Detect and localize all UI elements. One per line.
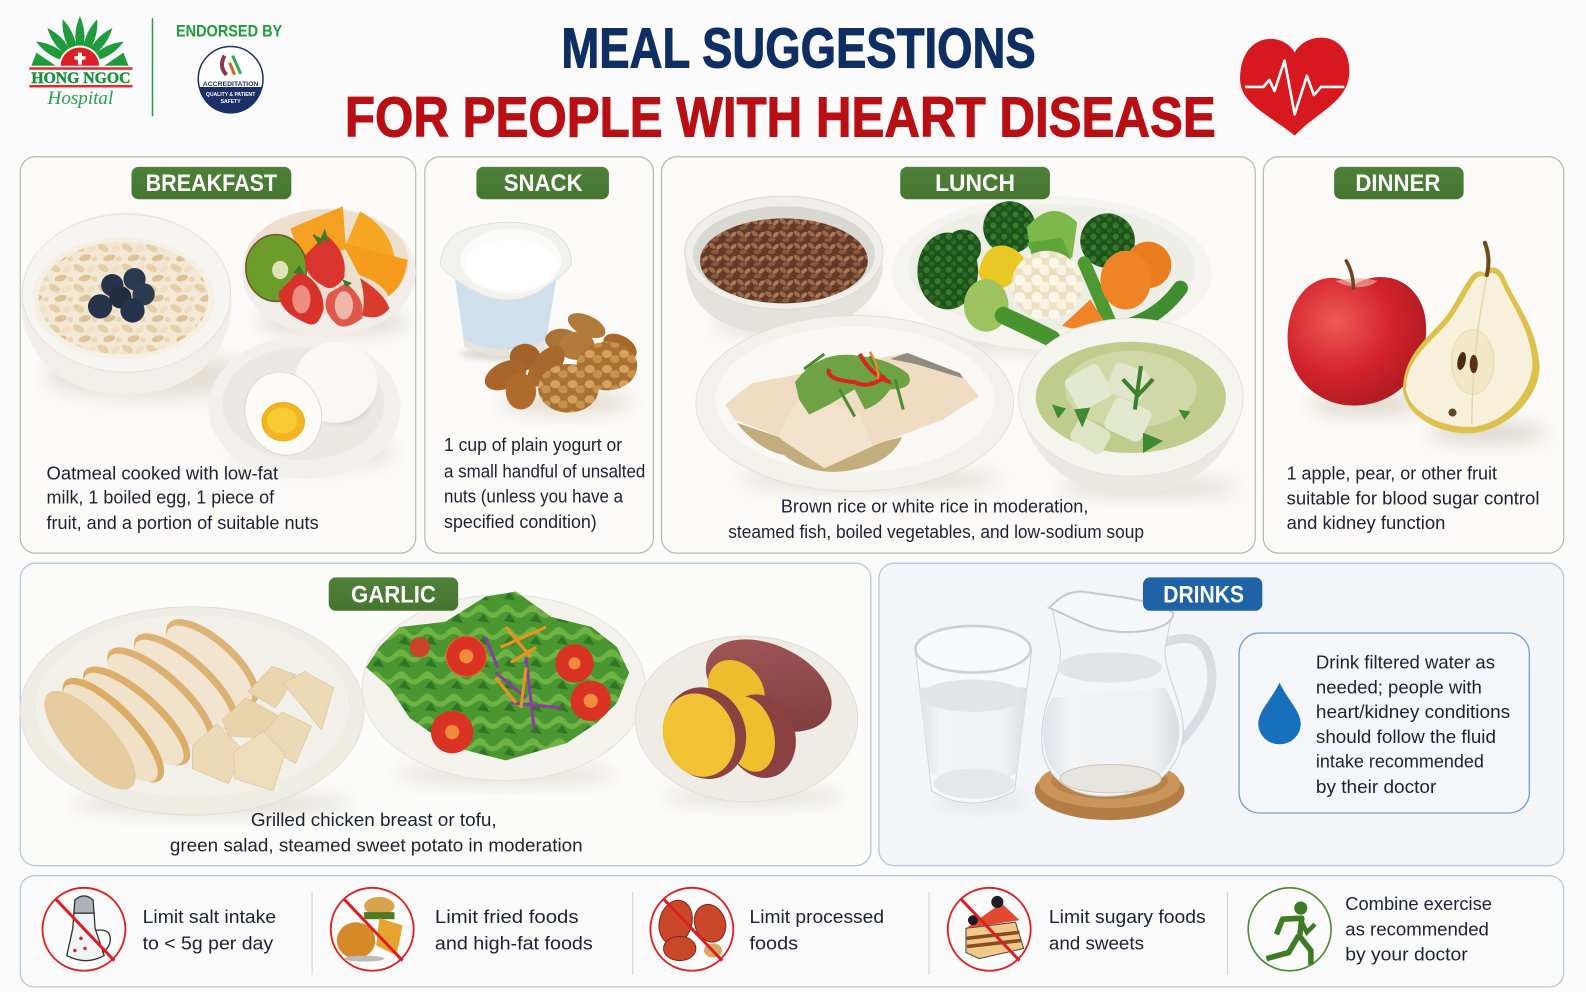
text: dinner description: 1 apple, pear, or other fruit (1287, 463, 1497, 483)
heading: lunch (900, 167, 1050, 199)
panel: garlic (20, 563, 871, 866)
panel: lunch (662, 157, 1255, 553)
food: oatmeal bowl (21, 212, 258, 398)
logo: Hong Ngoc Hospital: HONG NGOC (31, 70, 130, 87)
accreditation badge: SAFETY (221, 99, 241, 105)
food: boiled eggs (208, 336, 401, 479)
food: apple (1288, 261, 1426, 415)
panel: breakfast (20, 157, 416, 553)
vertical divider (152, 18, 153, 116)
text: garlic description: green salad, steamed sweet potato in moderation (170, 835, 583, 855)
food: glass of water (915, 626, 1032, 808)
title: FOR PEOPLE WITH HEART DISEASE (345, 87, 1216, 150)
food: pear half (1403, 243, 1546, 443)
text: snack description: 1 cup of plain yogurt or (444, 435, 622, 455)
tip: limit salt: to < 5g per day (143, 934, 274, 954)
tip: limit fried foods: Limit fried foods (435, 907, 579, 927)
text: garlic description: Grilled chicken breast or tofu, (251, 810, 497, 830)
text: breakfast description (47, 463, 319, 533)
tip: exercise: by your doctor (1345, 945, 1468, 965)
tip: limit processed foods: foods (750, 934, 798, 954)
food: brown rice bowl (685, 196, 885, 336)
food: steamed fish plate (696, 315, 1014, 491)
logo: Hong Ngoc Hospital: Hospital (47, 88, 113, 109)
title: MEAL SUGGESTIONS (561, 18, 1036, 81)
heading: snack: SNACK (504, 170, 583, 197)
food: yogurt cup (440, 222, 572, 361)
food: sweet potato plate (635, 621, 858, 805)
icon: water drop (1258, 683, 1301, 744)
icon: heart with ECG (1240, 38, 1349, 136)
tip: limit fried foods: and high-fat foods (435, 934, 593, 954)
tip: limit processed foods: Limit processed (750, 907, 884, 927)
text: breakfast description: Oatmeal cooked with low-fat (47, 463, 278, 483)
tip: exercise: as recommended (1345, 919, 1489, 939)
text: snack description: a small handful of unsalted (444, 461, 645, 481)
accreditation badge (198, 47, 263, 114)
accreditation badge: ACCREDITATION (203, 81, 259, 88)
text: snack description: specified condition) (444, 512, 597, 532)
text: lunch description (728, 497, 1144, 542)
text: snack description: nuts (unless you have a (444, 487, 624, 507)
text: breakfast description: fruit, and a portion of suitable nuts (47, 513, 319, 533)
text: water advice: heart/kidney conditions (1316, 702, 1510, 722)
title (345, 18, 1216, 150)
text: snack description (444, 435, 645, 532)
panel: tips strip (20, 876, 1564, 987)
food: chicken and tofu plate (20, 605, 364, 815)
heading: drinks: DRINKS (1163, 582, 1244, 609)
tip: limit sugary foods: Limit sugary foods (1049, 907, 1206, 927)
food: vegetable soup bowl (1019, 319, 1243, 497)
heading: snack (476, 167, 609, 199)
accreditation badge: QUALITY & PATIENT (206, 92, 256, 98)
tip: limit sugary foods (948, 888, 1206, 971)
endorsed by label: ENDORSED BY (176, 22, 282, 40)
food: tofu cubes (192, 666, 334, 791)
text: lunch description: Brown rice or white rice in moderation, (781, 497, 1088, 517)
text: dinner description: suitable for blood sugar control (1287, 489, 1539, 509)
text: breakfast description: milk, 1 boiled egg, 1 piece of (47, 488, 275, 508)
text: garlic description (170, 810, 583, 855)
tip: limit salt: Limit salt intake (143, 907, 276, 927)
callout: water advice (1239, 633, 1529, 813)
food: fruit bowl (242, 206, 416, 336)
food: vegetable plate (892, 196, 1212, 352)
heading: garlic (329, 577, 458, 611)
panel: drinks (879, 563, 1564, 866)
heading: dinner: DINNER (1355, 170, 1441, 197)
text: water advice (1316, 652, 1510, 797)
heading: breakfast: BREAKFAST (146, 170, 277, 197)
food: green salad bowl (362, 592, 645, 784)
tip: limit processed foods (650, 888, 884, 971)
tip: exercise: Combine exercise (1345, 894, 1492, 914)
heading: dinner (1334, 167, 1464, 199)
tip: limit sugary foods: and sweets (1049, 934, 1144, 954)
heading: drinks (1143, 577, 1262, 611)
food: water pitcher on coaster (1035, 592, 1212, 820)
text: water advice: Drink filtered water as (1316, 652, 1495, 672)
text: lunch description: steamed fish, boiled vegetables, and low-sodium soup (728, 522, 1144, 542)
text: water advice: should follow the fluid (1316, 727, 1496, 747)
text: dinner description (1287, 463, 1539, 533)
heading: garlic: GARLIC (351, 582, 436, 609)
tip: limit fried foods (331, 888, 593, 971)
heading: lunch: LUNCH (935, 170, 1015, 197)
text: water advice: needed; people with (1316, 678, 1482, 698)
text: dinner description: and kidney function (1287, 513, 1445, 533)
tip: limit salt (42, 888, 276, 971)
tip: exercise (1248, 888, 1492, 971)
text: water advice: intake recommended (1316, 752, 1484, 772)
panel: snack (425, 157, 653, 553)
logo: Hong Ngoc Hospital (29, 16, 133, 109)
panel: dinner (1263, 157, 1564, 553)
text: water advice: by their doctor (1316, 777, 1436, 797)
food: nuts (480, 308, 641, 413)
